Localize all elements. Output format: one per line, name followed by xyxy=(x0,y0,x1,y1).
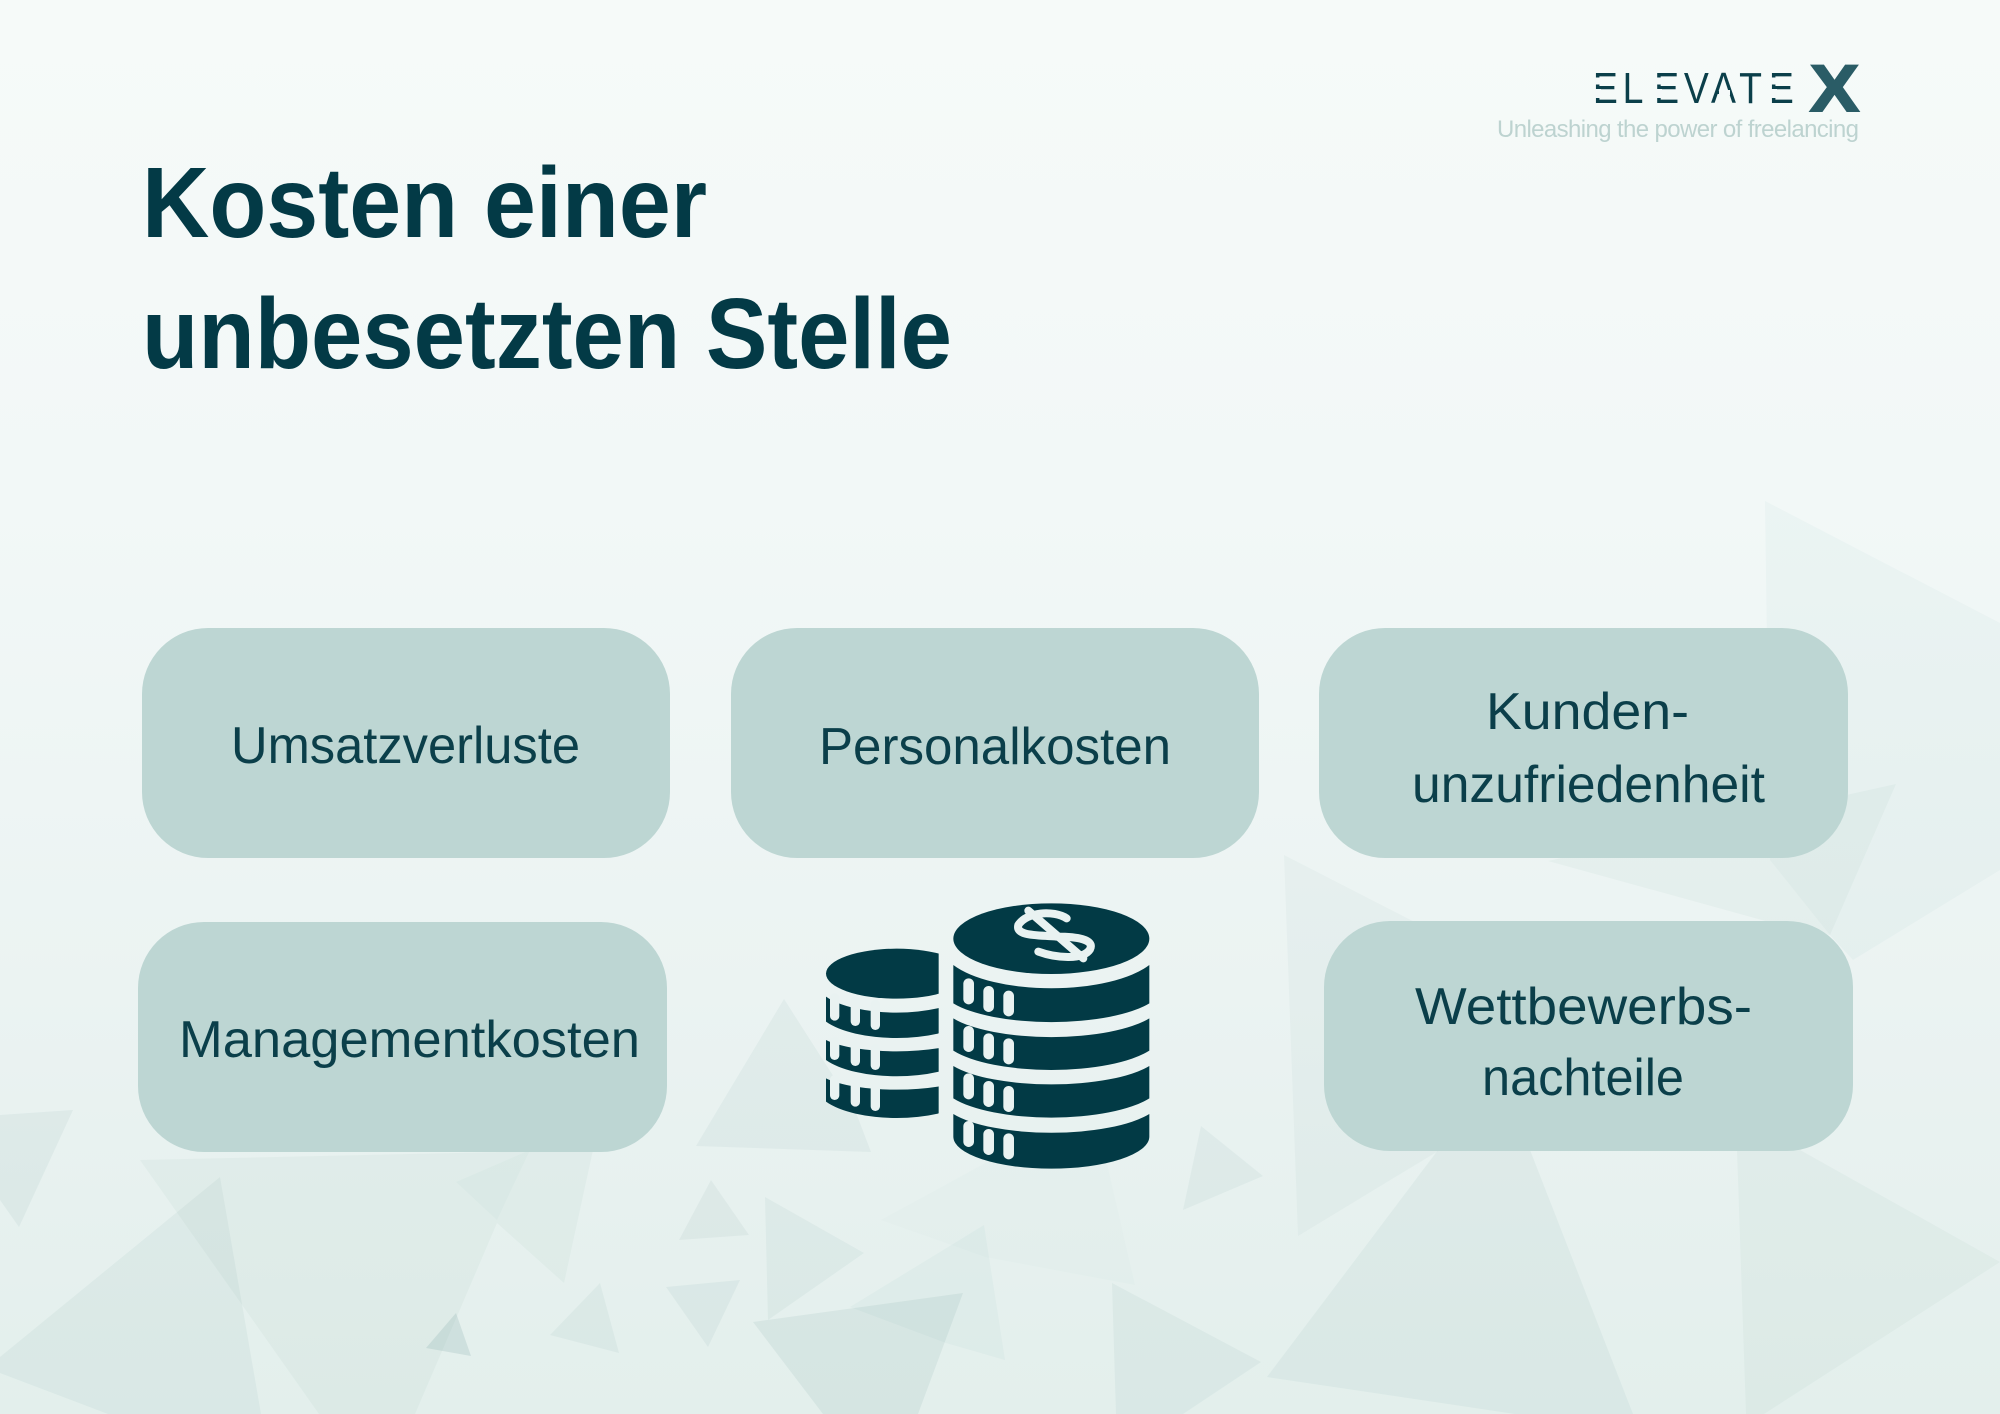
icon: dollar sign xyxy=(1018,911,1091,958)
title line 2: unbesetzten Stelle xyxy=(142,278,952,390)
panel: Wettbewerbsnachteile xyxy=(1324,921,1853,1151)
panel: Wettbewerbsnachteile: nachteile xyxy=(1482,1049,1684,1107)
panel: Umsatzverluste xyxy=(142,628,670,858)
icon: coin stacks xyxy=(826,903,1149,1169)
panel: Wettbewerbsnachteile: Wettbewerbs- xyxy=(1415,978,1752,1036)
title line 1: Kosten einer xyxy=(142,147,707,259)
title xyxy=(142,147,952,390)
panel: Umsatzverluste: Umsatzverluste xyxy=(231,717,580,775)
panel: Kundenunzufriedenheit: Kunden- xyxy=(1486,683,1689,741)
panel: Personalkosten xyxy=(731,628,1259,858)
panel: Kundenunzufriedenheit: unzufriedenheit xyxy=(1412,756,1766,814)
panel: Kundenunzufriedenheit xyxy=(1319,628,1848,858)
logo wordmark stem cut-outs xyxy=(1595,78,1777,98)
logo wordmark: ELEVATE xyxy=(1593,63,1794,113)
large coin stack xyxy=(953,903,1149,1169)
panel: Personalkosten: Personalkosten xyxy=(819,718,1171,776)
logo: ElevateX xyxy=(1497,51,1859,143)
background triangles xyxy=(0,501,2000,1414)
logo tagline: Unleashing the power of freelancing xyxy=(1497,116,1859,143)
small coin stack xyxy=(826,948,939,1118)
logo X mark: X xyxy=(1810,51,1859,125)
panel: Managementkosten xyxy=(138,922,667,1152)
panel: Managementkosten: Managementkosten xyxy=(179,1011,640,1069)
